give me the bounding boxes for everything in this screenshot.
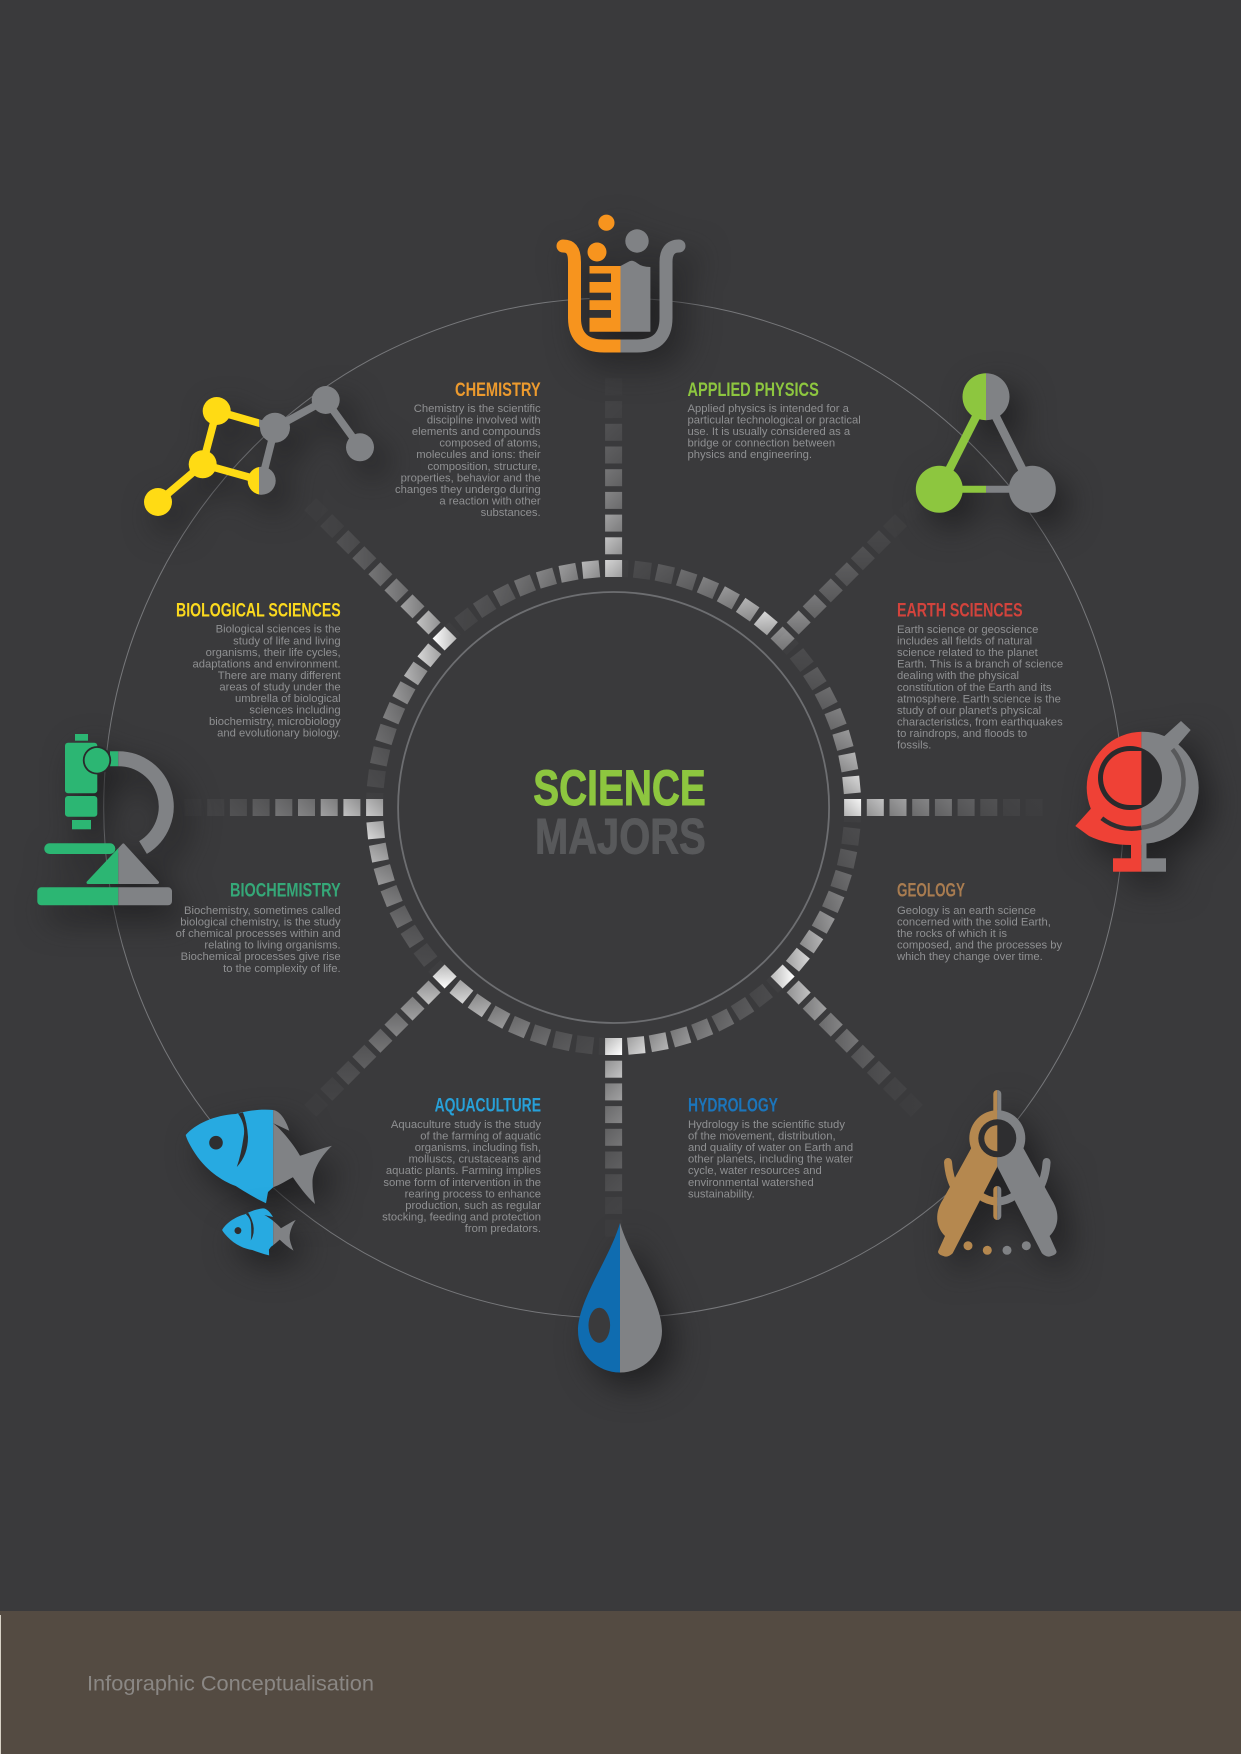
icon: small fish (219, 1202, 302, 1264)
icon: beaker (563, 215, 679, 346)
body: hydrology: environmental watershed (688, 1177, 814, 1189)
body: geology: Geology is an earth science (897, 905, 1036, 917)
body: earth sciences: atmosphere. Earth science is the (897, 693, 1061, 705)
body: geology: concerned with the solid Earth, (897, 917, 1051, 929)
heading: chemistry: CHEMISTRY (455, 379, 541, 401)
heading: aquaculture: AQUACULTURE (435, 1095, 541, 1117)
body: earth sciences: study of our planet's physical (897, 705, 1041, 717)
body: hydrology: other planets, including the water (688, 1154, 853, 1166)
icon: fish (186, 1110, 332, 1204)
body: hydrology: sustainability. (688, 1188, 755, 1200)
body: biochemistry: biological chemistry, is the study (180, 917, 341, 929)
body: geology: composed, and the processes by (897, 940, 1062, 952)
body: chemistry: Chemistry is the scientific (414, 403, 541, 415)
body: earth sciences: science related to the planet (897, 647, 1039, 659)
body: earth sciences: includes all fields of natural (897, 636, 1032, 648)
body: biological sciences: umbrella of biological (235, 693, 341, 705)
body: biochemistry: Biochemistry, sometimes called (184, 905, 341, 917)
body: applied physics: bridge or connection between (688, 438, 835, 450)
heading: hydrology: HYDROLOGY (688, 1095, 778, 1117)
body: aquaculture: stocking, feeding and protection (382, 1211, 541, 1223)
body: biological sciences: adaptations and environment. (192, 658, 341, 670)
heading: biochemistry: BIOCHEMISTRY (230, 880, 341, 902)
footer credit: Infographic Conceptualisation (87, 1673, 374, 1696)
outer ring (104, 298, 1124, 1318)
body: chemistry: changes they undergo during (395, 484, 541, 496)
body: biological sciences: Biological sciences is the (216, 624, 341, 636)
body: hydrology: and quality of water on Earth and (688, 1142, 853, 1154)
body: biochemistry: of chemical processes within and (176, 928, 341, 940)
body: applied physics: Applied physics is intended for a (688, 403, 850, 415)
body: aquaculture: molluscs, crustaceans and (408, 1154, 541, 1166)
body: biological sciences: sciences including (249, 705, 341, 717)
heading: geology: GEOLOGY (897, 880, 965, 902)
body: biological sciences: study of life and living (233, 635, 341, 647)
body: biological sciences: and evolutionary biology. (217, 728, 341, 740)
panel: applied physics (688, 379, 861, 461)
body: aquaculture: organisms, including fish, (415, 1142, 541, 1154)
body: chemistry: composition, structure, (428, 461, 541, 473)
panel: earth sciences (897, 600, 1063, 752)
panel: biological sciences (176, 600, 342, 740)
icon: water drop (578, 1223, 662, 1372)
body: geology: which they change over time. (896, 951, 1043, 963)
body: earth sciences: Earth. This is a branch of science (897, 659, 1063, 671)
body: aquaculture: rearing process to enhance (405, 1188, 541, 1200)
body: aquaculture: from predators. (465, 1223, 541, 1235)
panel: geology (896, 880, 1062, 963)
panel: biochemistry (176, 880, 341, 975)
body: aquaculture: aquatic plants. Farming implies (386, 1165, 541, 1177)
body: chemistry: elements and compounds (412, 426, 541, 438)
body: earth sciences: characteristics, from earthquakes (897, 716, 1063, 728)
body: biological sciences: biochemistry, microbiology (209, 716, 341, 728)
body: earth sciences: fossils. (897, 740, 931, 752)
heading: biological sciences: BIOLOGICAL SCIENCES (176, 600, 341, 622)
title (533, 760, 706, 864)
panel: hydrology (688, 1095, 853, 1200)
icon: atoms triangle (916, 373, 1056, 513)
body: hydrology: Hydrology is the scientific study (688, 1119, 845, 1131)
body: chemistry: discipline involved with (427, 415, 541, 427)
body: chemistry: molecules and ions: their (416, 449, 541, 461)
body: biological sciences: There are many different (218, 670, 342, 682)
body: biological sciences: organisms, their life cycles, (206, 647, 341, 659)
body: chemistry: properties, behavior and the (401, 472, 541, 484)
footer band (0, 1611, 1241, 1754)
body: hydrology: cycle, water resources and (688, 1165, 822, 1177)
body: chemistry: composed of atoms, (439, 438, 541, 450)
body: applied physics: physics and engineering. (688, 449, 812, 461)
title: SCIENCE (533, 760, 706, 816)
body: earth sciences: to raindrops, and floods to (897, 728, 1027, 740)
inner ring (398, 592, 829, 1023)
body: geology: the rocks of which it is (897, 928, 1007, 940)
body: biochemistry: relating to living organisms. (204, 940, 341, 952)
title: MAJORS (535, 808, 706, 864)
dashed spokes and ring segments (184, 378, 1043, 1237)
body: aquaculture: Aquaculture study is the study (391, 1119, 541, 1131)
body: aquaculture: production, such as regular (405, 1200, 541, 1212)
icon: molecule (144, 386, 374, 516)
body: biochemistry: Biochemical processes give rise (181, 951, 341, 963)
body: earth sciences: constitution of the Earth and its (897, 682, 1052, 694)
body: biochemistry: to the complexity of life. (223, 963, 341, 975)
body: aquaculture: some form of intervention in the (383, 1177, 541, 1189)
body: earth sciences: dealing with the physical (897, 670, 1019, 682)
icon: globe (1075, 721, 1199, 872)
body: biological sciences: areas of study under the (219, 682, 341, 694)
icon: microscope (37, 734, 172, 905)
body: chemistry: a reaction with other (439, 495, 541, 507)
heading: applied physics: APPLIED PHYSICS (688, 379, 819, 401)
icon: compass (937, 1094, 1057, 1257)
heading: earth sciences: EARTH SCIENCES (897, 600, 1023, 622)
body: hydrology: of the movement, distribution, (688, 1131, 836, 1143)
panel: aquaculture (382, 1095, 541, 1235)
body: aquaculture: of the farming of aquatic (420, 1131, 541, 1143)
body: earth sciences: Earth science or geoscience (897, 624, 1038, 636)
panel: chemistry (395, 379, 541, 519)
body: applied physics: use. It is usually considered as a (688, 426, 851, 438)
body: chemistry: substances. (481, 507, 541, 519)
body: applied physics: particular technological or practical (688, 415, 861, 427)
